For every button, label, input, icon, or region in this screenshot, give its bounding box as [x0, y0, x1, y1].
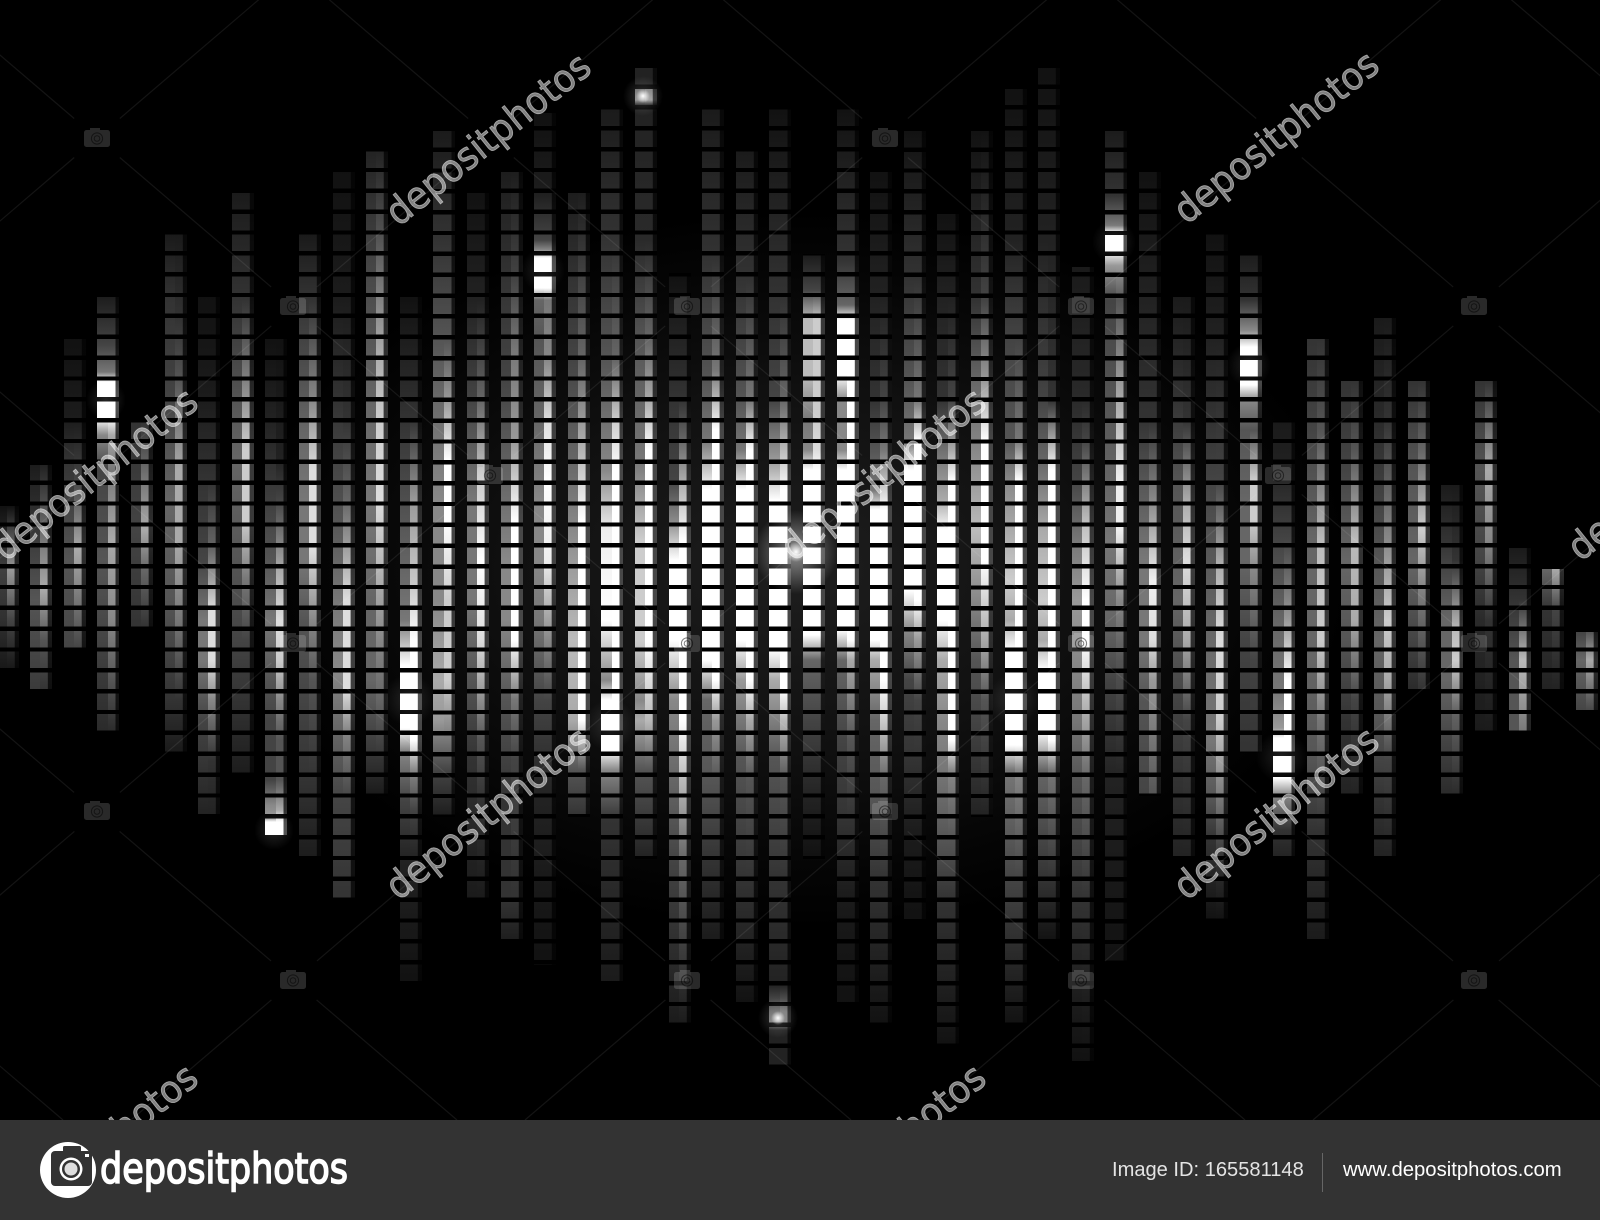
bar 13	[400, 296, 422, 985]
bar 19	[601, 106, 623, 985]
bar 22	[702, 106, 724, 943]
bar 34	[1105, 128, 1127, 965]
bar 10	[299, 234, 321, 859]
bar 29	[937, 211, 959, 1048]
bar 30	[971, 128, 993, 817]
bar 4	[97, 296, 119, 733]
bar 28	[904, 128, 926, 922]
watermark text: depositphotos	[377, 44, 599, 234]
bar 33	[1072, 267, 1094, 1061]
bar 46	[1508, 548, 1530, 733]
bar 37	[1206, 234, 1228, 922]
bar 36	[1172, 296, 1194, 859]
bar 43	[1408, 381, 1430, 691]
bar 14	[433, 128, 455, 817]
bar 39	[1273, 421, 1295, 859]
website url: www.depositphotos.com	[1342, 1159, 1562, 1181]
bar 48	[1576, 632, 1598, 712]
bar 21	[668, 273, 690, 1027]
bar 25	[803, 254, 825, 859]
bar 8	[232, 190, 254, 776]
bar 17	[534, 113, 556, 965]
image id: Image ID: 165581148	[1112, 1159, 1304, 1181]
bar 9	[265, 337, 287, 838]
watermark text: depositphotos	[1165, 42, 1387, 232]
bar 41	[1340, 381, 1362, 796]
bar 15	[467, 190, 489, 900]
bar 2	[30, 465, 52, 691]
bar 44	[1441, 484, 1463, 796]
logo wordmark: depositphotos	[100, 1144, 348, 1193]
bar 38	[1240, 254, 1262, 753]
bar 5	[131, 421, 153, 628]
bar 35	[1139, 169, 1161, 796]
bar 32	[1038, 65, 1060, 943]
bar 1	[0, 506, 18, 669]
icon: camera logo	[40, 1142, 96, 1198]
watermark text: depositphotos	[377, 718, 599, 908]
bar 47	[1542, 569, 1564, 691]
bar 24	[769, 106, 791, 1068]
bar 26	[836, 106, 858, 1006]
bar 20	[635, 65, 657, 859]
bar 42	[1374, 317, 1396, 859]
bar 40	[1307, 337, 1329, 943]
footer bar	[0, 1120, 1600, 1220]
bar 45	[1475, 381, 1497, 733]
bar 23	[736, 148, 758, 1006]
bar 6	[164, 234, 186, 753]
bar 18	[568, 190, 590, 817]
bar 31	[1004, 86, 1026, 1027]
camera marks	[84, 128, 1487, 989]
bar 12	[366, 148, 388, 796]
bar 16	[500, 169, 522, 943]
bar 7	[198, 296, 220, 817]
watermark text: depositphotos	[772, 379, 994, 569]
bar 3	[64, 337, 86, 649]
bar 27	[870, 169, 892, 1027]
watermark text: depositphotos	[1165, 718, 1387, 908]
bar 11	[332, 169, 354, 900]
